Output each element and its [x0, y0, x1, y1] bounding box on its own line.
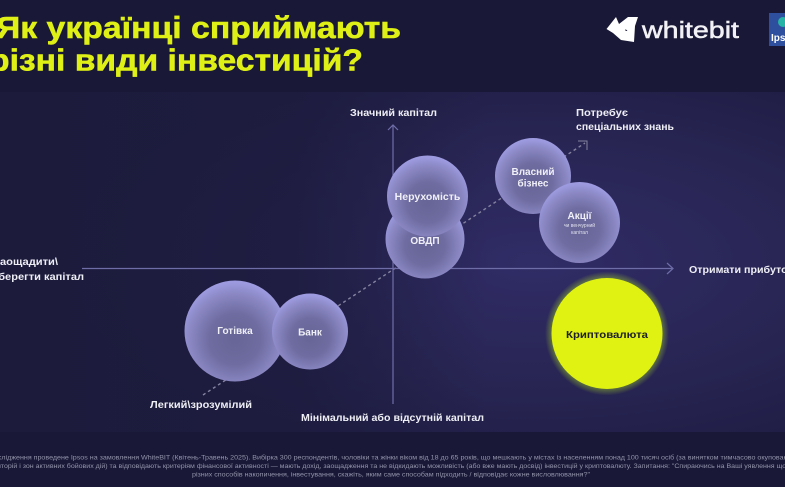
footnote: територій і зон активних бойових дій) та відповідають критеріям фінансової активності — мають дохід, заощадження та не відкидають можливість (або вже мають досвід) інвестицій у криптовалюту. Запитання: "Спираючись на Ваші уявлення щодо [0, 462, 785, 470]
axis label: easy to understand: Легкий\зрозумілий [150, 399, 252, 411]
logo: WhiteBIT [606, 17, 740, 43]
axis label: save capital [0, 256, 84, 283]
panel: chart background [0, 92, 785, 432]
logo wordmark: whitebit [641, 17, 740, 43]
axis label: requires special knowledge: Потребує [576, 107, 628, 119]
bubble: cryptocurrency: Криптовалюта [566, 329, 648, 341]
bubble: own business: бізнес [518, 178, 549, 190]
bubble: own business [495, 138, 571, 214]
horizontal axis arrow [82, 263, 673, 274]
axis label: minimal capital: Мінімальний або відсутній капітал [301, 412, 484, 424]
title: Як українці сприймають [0, 10, 401, 45]
axis label: requires special knowledge [576, 107, 675, 133]
bubble: stocks: капітал [571, 230, 588, 236]
footnote: різних способів накопичення, інвестування, скажіть, яким саме способам підходить / відповідає кожне висловлювання?" [192, 470, 591, 478]
bubble: cash: Готівка [217, 326, 253, 337]
bubble: cash [184, 280, 286, 382]
bubble: stocks: Акції [568, 211, 592, 222]
vertical axis arrow [388, 125, 398, 404]
axis label: requires special knowledge: спеціальних знань [576, 121, 675, 133]
title [0, 10, 401, 78]
bubble: stocks [539, 182, 620, 263]
logo: Ipsos [769, 13, 785, 46]
bubble: bank [272, 294, 348, 370]
footnote [0, 454, 785, 478]
bubble: real estate: Нерухомість [395, 191, 461, 203]
bubble: real estate [387, 156, 468, 236]
axis label: significant capital: Значний капітал [350, 107, 437, 119]
icon: WhiteBIT mark [606, 17, 638, 42]
bubble: cryptocurrency [545, 272, 669, 396]
footnote: Дослідження проведене Ipsos на замовлення WhiteBIT (Квітень-Травень 2025). Вибірка 300 респондентів, чоловіки та жінки віком від 18 до 65 років, що мешкають у містах із населенням понад 100 тисяч осіб (за винятком тимчасово окупованих [0, 454, 785, 462]
bubble: bank: Банк [298, 328, 323, 338]
bubble: stocks: чи венчурний [564, 222, 595, 229]
bubble: own business: Власний [511, 167, 555, 178]
bubble: government bonds [386, 200, 464, 278]
bubble: government bonds: ОВДП [410, 236, 440, 247]
diagonal dashed axis [203, 141, 587, 395]
